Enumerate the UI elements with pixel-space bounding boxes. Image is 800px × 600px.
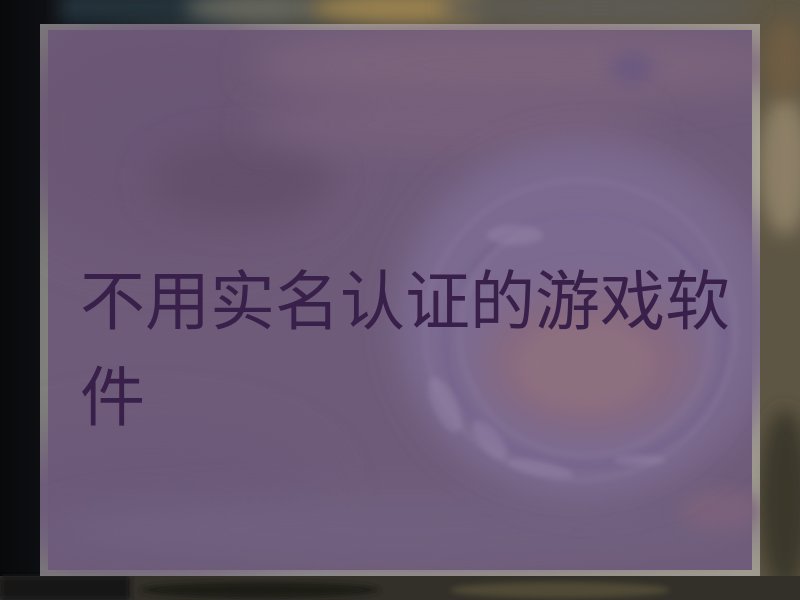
title: 不用实名认证的游戏软件 (80, 265, 730, 434)
